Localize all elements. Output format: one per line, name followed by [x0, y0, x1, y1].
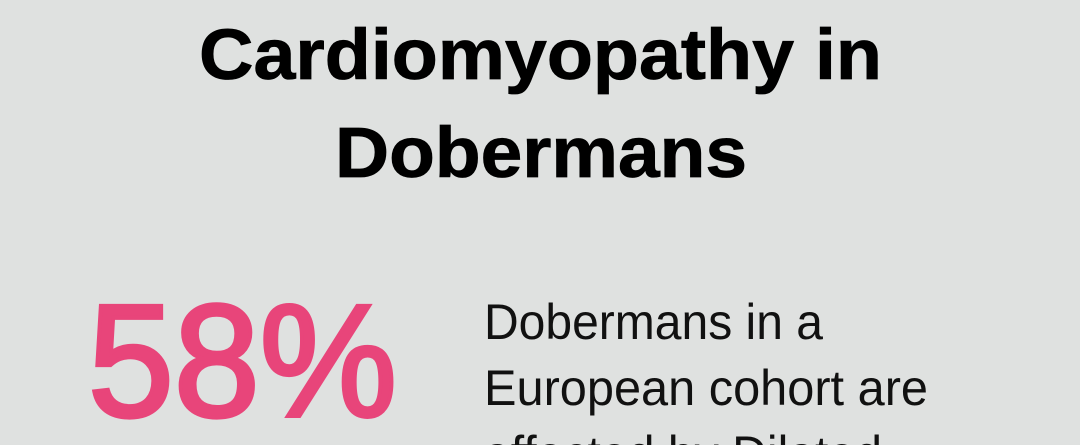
description text: [484, 294, 928, 445]
title: Cardiomyopathy in: [199, 16, 882, 95]
title: Dobermans: [335, 114, 747, 193]
title: [199, 16, 882, 193]
statistic: 58%: 58%: [88, 271, 397, 445]
description text: European cohort are: [484, 360, 928, 416]
description text: Dobermans in a: [484, 294, 823, 350]
